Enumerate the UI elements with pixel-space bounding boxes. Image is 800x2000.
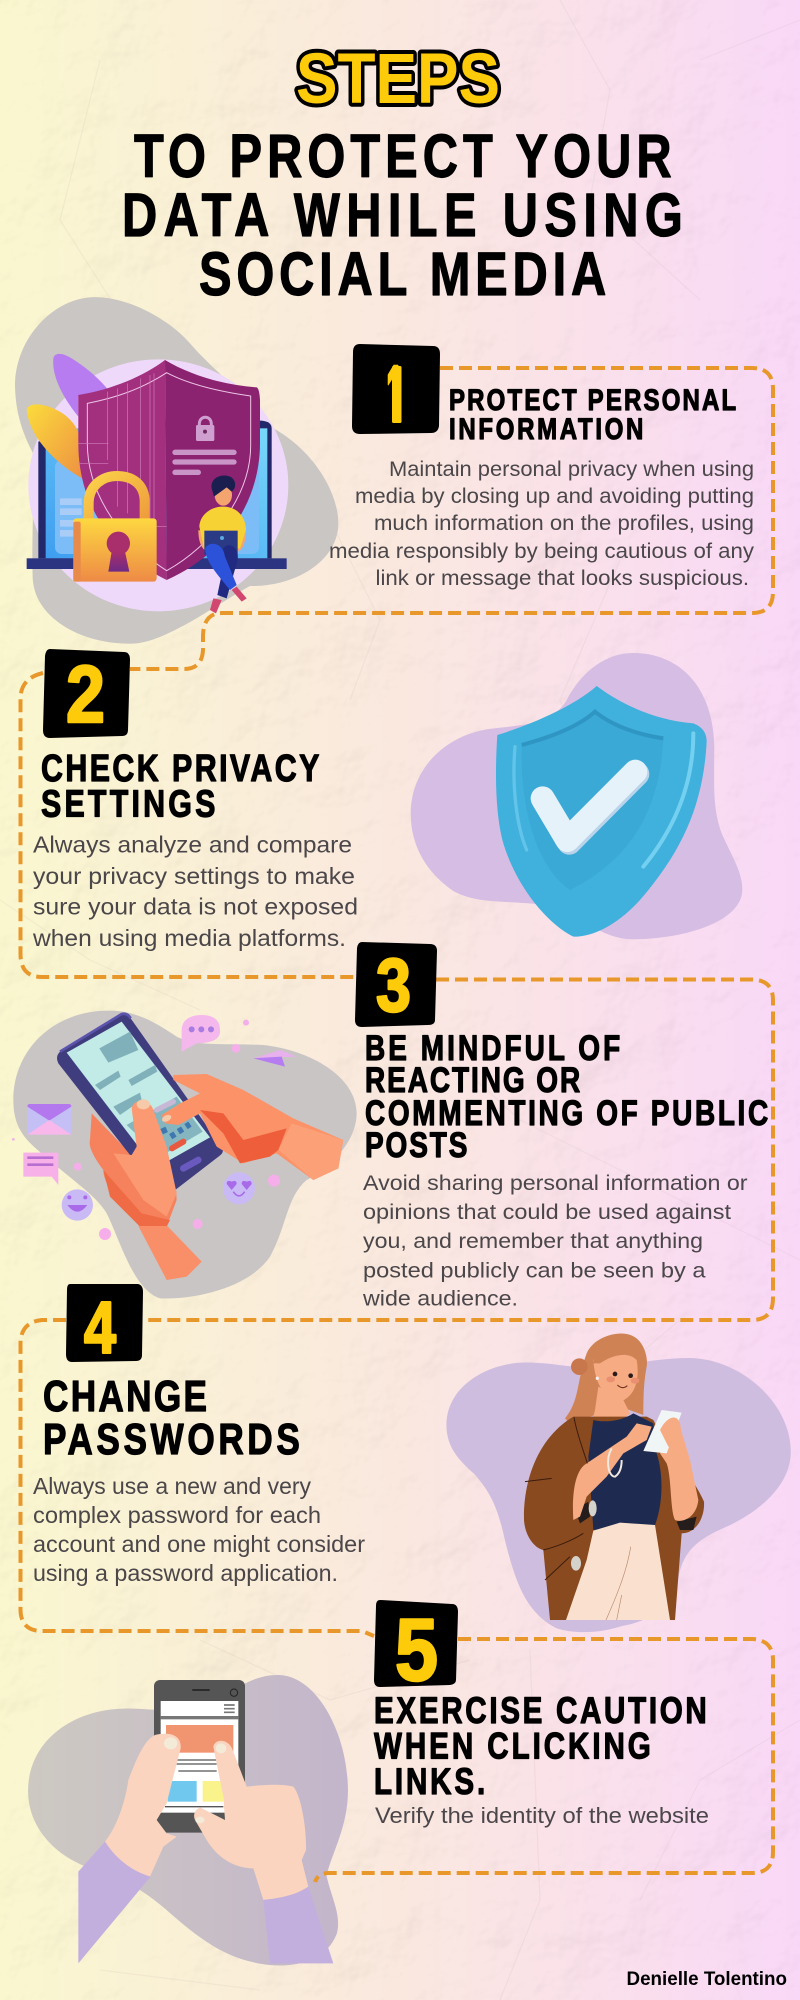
illustration: shield, padlock and person with laptop <box>15 297 338 644</box>
heading 3: COMMENTING OF PUBLIC <box>365 1093 768 1133</box>
icon: chat dots <box>182 1015 220 1052</box>
dashed border with connector to step 2 <box>130 368 773 669</box>
badge 3 <box>355 942 437 1027</box>
body text 3 <box>362 1172 748 1311</box>
heading 1 <box>449 382 736 446</box>
heading 1: PROTECT PERSONAL <box>449 382 736 417</box>
dashed border <box>143 980 773 1320</box>
heading 3 <box>365 1028 768 1165</box>
body text 2 <box>32 832 358 951</box>
icon: smiley <box>62 1189 93 1221</box>
body text 4 <box>33 1473 365 1586</box>
heading 5: EXERCISE CAUTION <box>374 1691 707 1732</box>
badge 3: 3 <box>376 943 411 1027</box>
body text 1: link or message that looks suspicious. <box>376 567 749 590</box>
title line 3: SOCIAL MEDIA <box>199 240 606 308</box>
heading 4: PASSWORDS <box>43 1415 300 1464</box>
badge 5: 5 <box>395 1600 438 1699</box>
illustration: hands holding a phone with message icons <box>12 1011 357 1298</box>
title word: steps: STEPS <box>296 40 500 119</box>
heading 2: SETTINGS <box>41 783 215 825</box>
badge 1: 1 <box>386 348 404 441</box>
body text 4: using a password application. <box>33 1560 338 1586</box>
body text 1: much information on the profiles, using <box>374 512 754 535</box>
body text 1 <box>329 458 755 590</box>
body text 3: opinions that could be used against <box>363 1201 731 1224</box>
illustration: blue shield with check mark <box>411 653 742 939</box>
panel: step 1 <box>130 344 773 669</box>
heading 3: BE MINDFUL OF <box>365 1028 620 1068</box>
icon: message bubble <box>23 1153 58 1185</box>
badge 2: 2 <box>66 650 105 740</box>
title line 1: TO PROTECT YOUR <box>134 122 672 190</box>
badge 4 <box>66 1284 143 1369</box>
panel: step 3 <box>143 942 773 1320</box>
illustration: hands tapping a smartphone <box>28 1675 348 1966</box>
body text 1: media by closing up and avoiding putting <box>355 485 754 508</box>
heading 5: WHEN CLICKING <box>374 1726 651 1767</box>
body text 2: your privacy settings to make <box>33 863 355 889</box>
title <box>122 40 683 308</box>
body text 3: you, and remember that anything <box>363 1230 703 1253</box>
title line 2: DATA WHILE USING <box>122 181 683 249</box>
panel: step 2 <box>20 649 358 977</box>
body text 1: Maintain personal privacy when using <box>389 458 754 481</box>
body text 4: complex password for each <box>33 1502 321 1528</box>
badge 4: 4 <box>84 1288 116 1369</box>
heading 4: CHANGE <box>43 1372 207 1421</box>
body text 4: account and one might consider <box>33 1531 365 1557</box>
dashed border <box>20 1320 374 1636</box>
icon: paper plane <box>253 1050 297 1067</box>
panel: step 4 <box>20 1284 374 1636</box>
heading 3: REACTING OR <box>365 1060 580 1100</box>
body text 2: Always analyze and compare <box>33 832 352 858</box>
illustration: woman holding a phone <box>446 1334 791 1632</box>
heading 4 <box>43 1372 300 1464</box>
icon: envelope <box>27 1104 71 1135</box>
body text 1: media responsibly by being cautious of any <box>329 540 755 563</box>
heading 5: LINKS. <box>374 1762 485 1803</box>
heading 2 <box>41 748 319 825</box>
body text 3: wide audience. <box>362 1288 518 1311</box>
body text 2: sure your data is not exposed <box>33 894 358 920</box>
body text 4: Always use a new and very <box>33 1473 311 1499</box>
body text 3: Avoid sharing personal information or <box>363 1172 748 1195</box>
heading 1: INFORMATION <box>449 411 643 446</box>
heading 5 <box>374 1691 707 1803</box>
badge 2 <box>43 649 130 740</box>
body text 3: posted publicly can be seen by a <box>363 1260 706 1282</box>
credit: Denielle Tolentino <box>626 1969 787 1990</box>
badge 1 <box>352 344 440 441</box>
icon: heart eyes <box>223 1172 255 1204</box>
body text 2: when using media platforms. <box>32 925 346 951</box>
dashed border <box>315 1639 773 1882</box>
badge 5 <box>374 1600 458 1699</box>
heading 2: CHECK PRIVACY <box>41 748 319 790</box>
heading 3: POSTS <box>365 1125 467 1165</box>
panel: step 5 <box>315 1600 773 1882</box>
dashed border <box>20 673 356 977</box>
body text 5: Verify the identity of the website <box>375 1803 709 1828</box>
